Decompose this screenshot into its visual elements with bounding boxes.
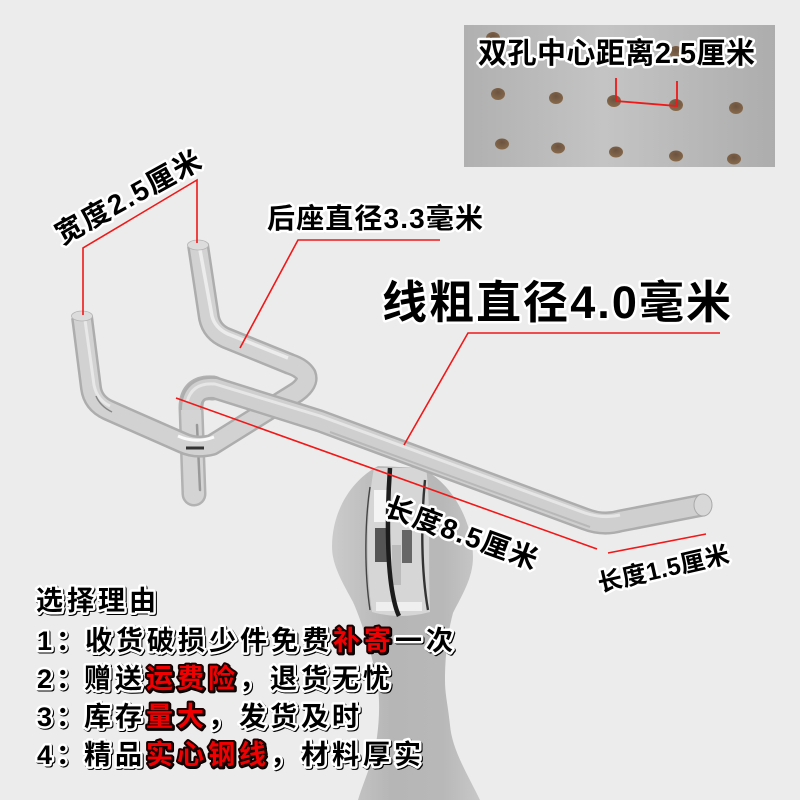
reasons list — [36, 586, 457, 770]
pegboard label: 双孔中心距离2.5厘米 — [478, 37, 755, 70]
stand base — [332, 466, 480, 800]
metal clip — [366, 468, 430, 616]
reason 1: 1： — [37, 626, 87, 656]
panel: pegboard inset — [464, 25, 775, 167]
reason 4: 精品 — [84, 740, 146, 770]
reason 1: 收货破损少件免费 — [85, 626, 333, 656]
label: wire diameter: 线粗直径4.0毫米 — [382, 277, 731, 328]
reason 4: 实心钢线，材料厚实 — [146, 740, 425, 770]
reason 2: 运费险，退货无忧 — [146, 664, 394, 694]
reason 2: 2： — [37, 664, 87, 694]
arm tip — [694, 494, 712, 516]
hook: main arm — [187, 384, 712, 527]
reason 3: 3： — [37, 702, 87, 732]
list heading: 选择理由 — [36, 586, 160, 616]
pegboard holes — [486, 32, 743, 164]
red spacing marker — [616, 78, 677, 106]
reason 1: 补寄一次 — [333, 626, 457, 656]
reason 3: 量大，发货及时 — [146, 702, 363, 732]
wire leader — [404, 333, 720, 445]
hook: main stub behind bracket — [191, 388, 213, 494]
bracket dark glint — [186, 446, 204, 450]
width bracket — [83, 180, 197, 315]
label: length 8.5: 长度8.5厘米 — [381, 492, 542, 575]
hook: rear U bracket — [72, 240, 307, 448]
red dimension lines — [83, 180, 720, 553]
length 1.5 line — [608, 534, 706, 553]
label: length 1.5: 长度1.5厘米 — [595, 540, 732, 598]
reason 3: 库存 — [84, 702, 146, 732]
wire tips — [72, 311, 92, 321]
length 8.5 line — [176, 398, 597, 549]
label: seat diameter: 后座直径3.3毫米 — [267, 203, 483, 234]
label: width: 宽度2.5厘米 — [50, 145, 207, 250]
reason 2: 赠送 — [84, 664, 146, 694]
reason 4: 4： — [37, 740, 87, 770]
seat leader — [240, 240, 440, 348]
stand body — [332, 466, 480, 800]
